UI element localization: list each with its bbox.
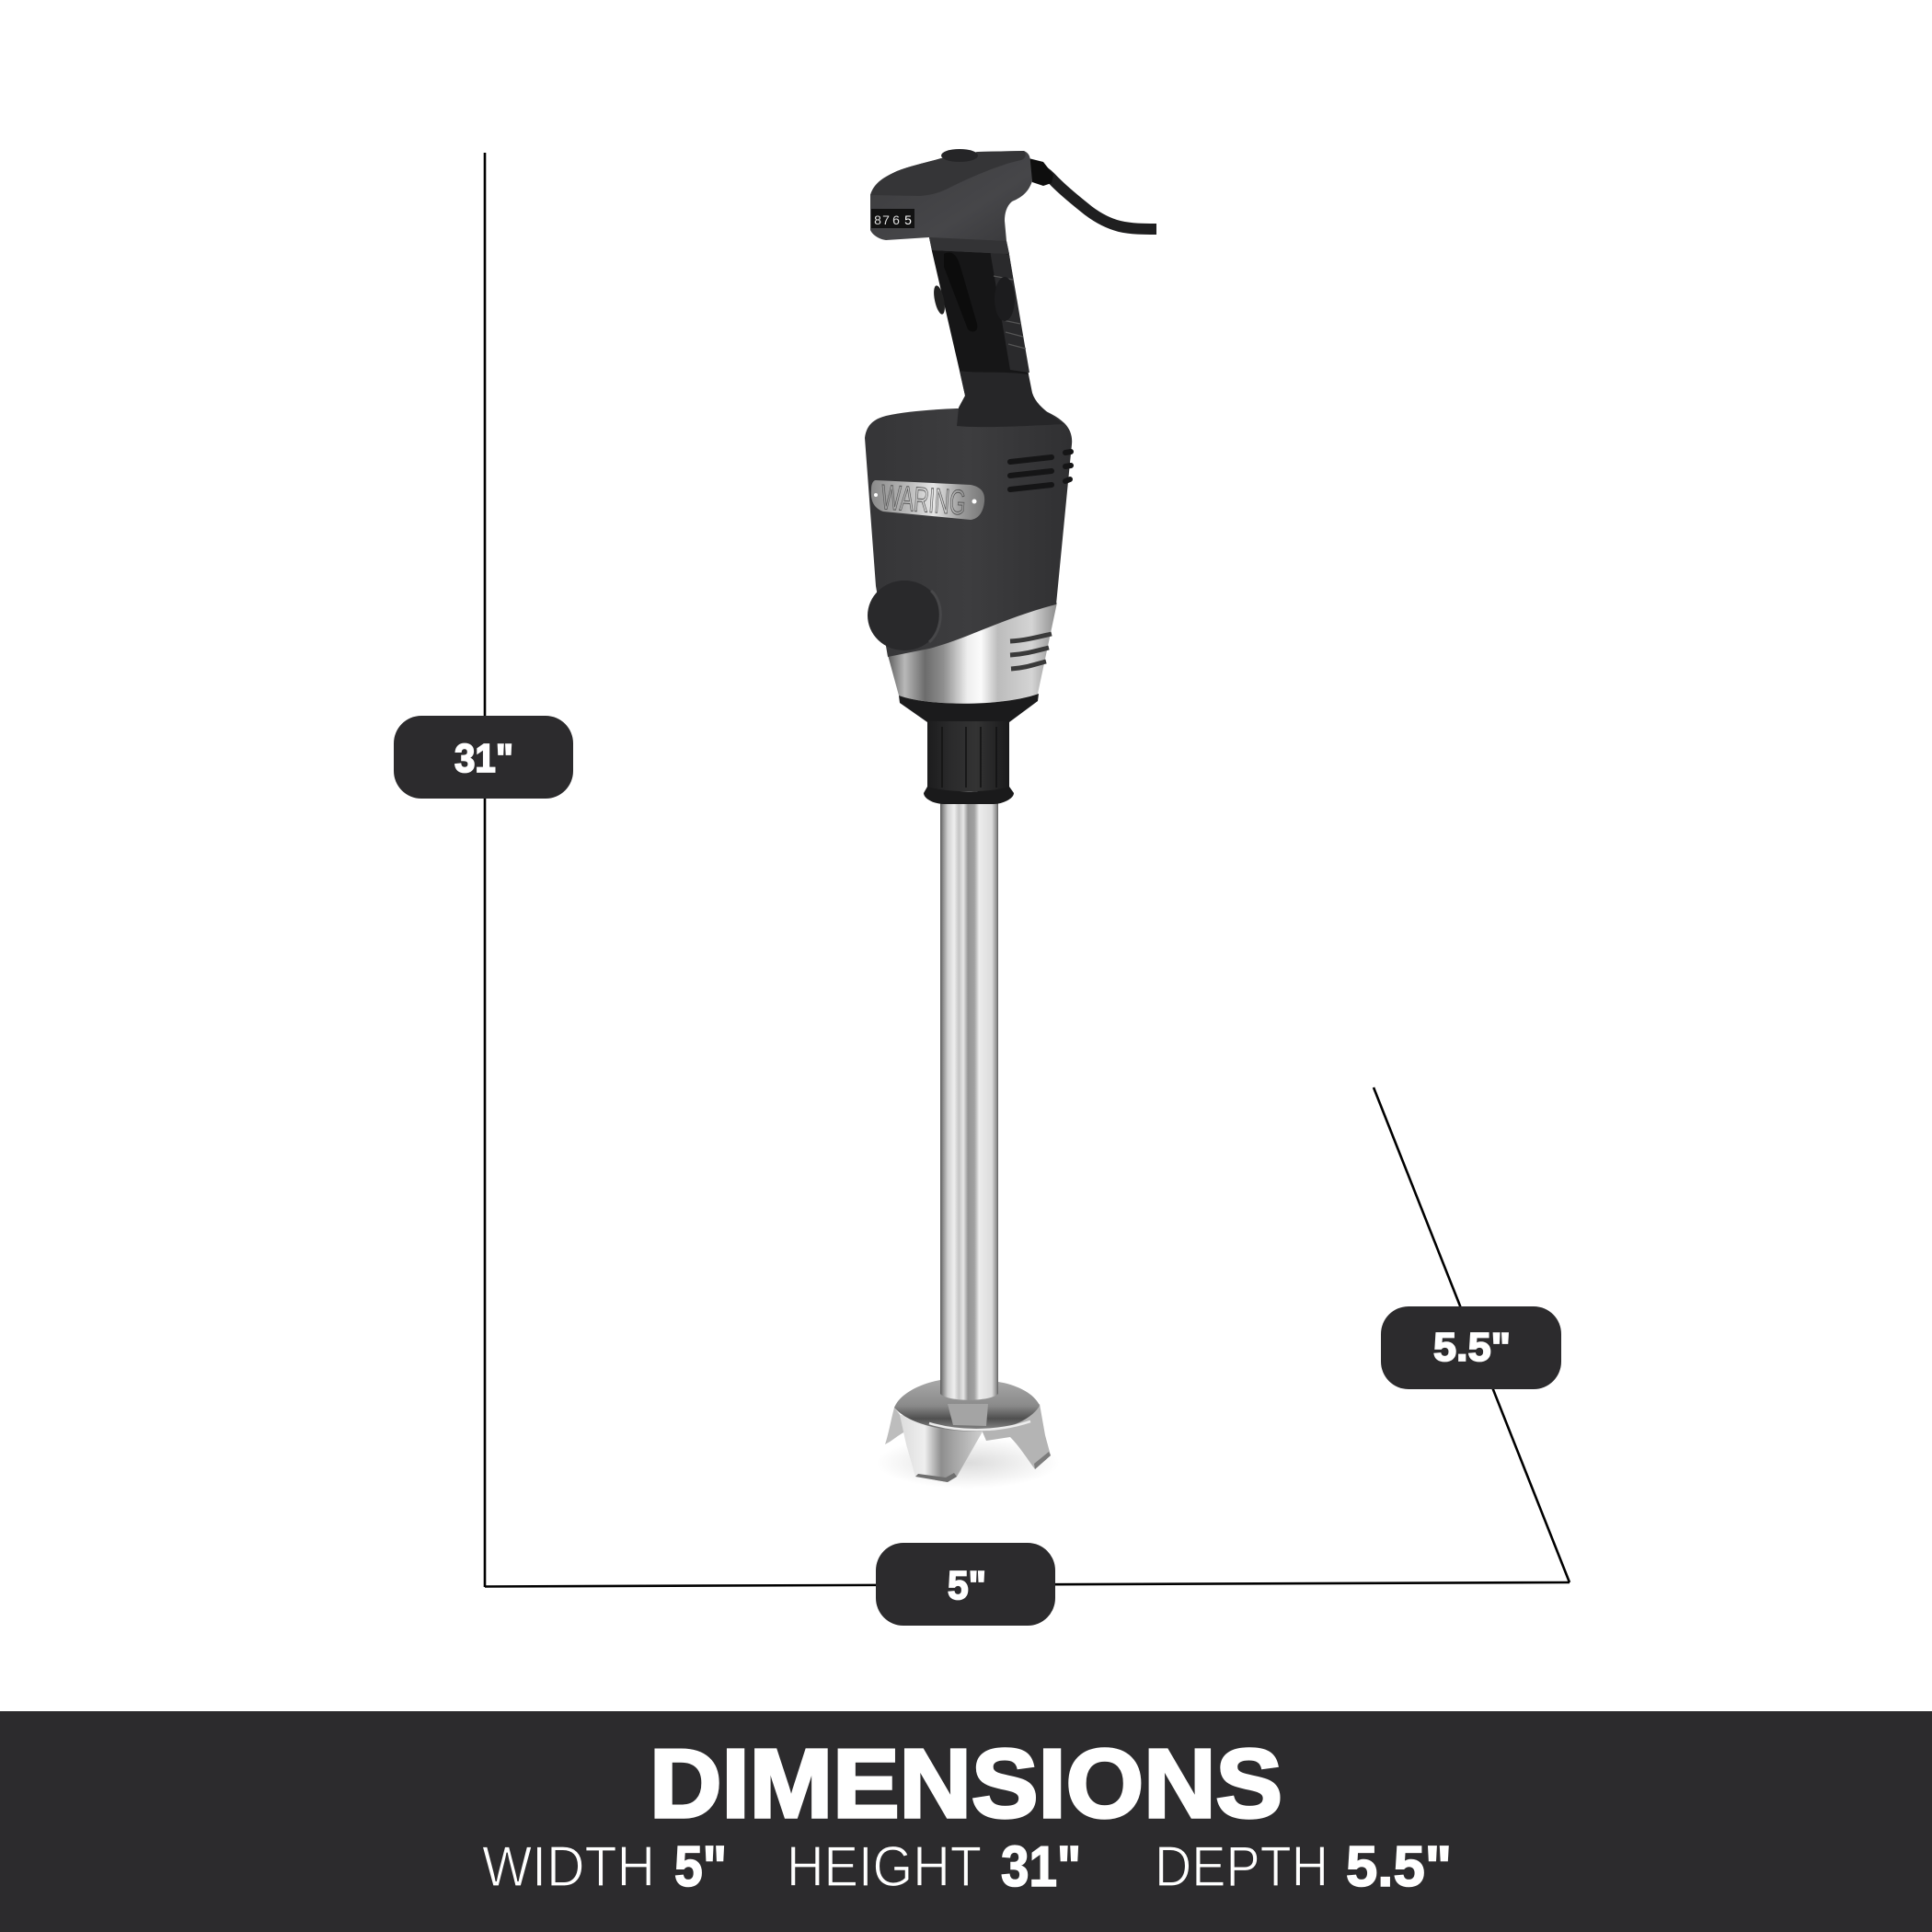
grip handle [929, 237, 1064, 427]
dimension line: height [484, 153, 486, 1587]
collar ring [924, 787, 1014, 804]
speed dial: 8 [874, 213, 881, 227]
dimension label: 5.5 inches: 5.5" [1433, 1325, 1511, 1370]
nameplate: WARING [880, 478, 967, 523]
speed dial: 6 [892, 213, 900, 227]
dimension line: depth [1374, 1087, 1570, 1582]
speed dial [871, 209, 914, 228]
speed dial: 7 [882, 213, 890, 227]
housing vents [1010, 452, 1071, 489]
dimension line: width [485, 1582, 1570, 1586]
depth measure [1155, 1835, 1452, 1899]
blade guard foot [876, 1380, 1060, 1489]
height measure: HEIGHT [787, 1835, 982, 1899]
dimension label: 5 inches [876, 1543, 1055, 1626]
power cord [1029, 158, 1156, 229]
chrome motor band [888, 603, 1057, 704]
locking knob [868, 581, 941, 650]
depth measure: 5.5" [1346, 1835, 1452, 1899]
height measure: 31" [1001, 1835, 1081, 1899]
speed dial: 5 [904, 213, 912, 227]
nameplate [871, 478, 984, 523]
collar ridges [942, 727, 996, 788]
dimension label: 31 inches [394, 716, 573, 799]
chrome vents [1010, 634, 1052, 669]
title: DIMENSIONS [650, 1730, 1282, 1838]
width measure: 5" [674, 1835, 727, 1899]
motor housing [865, 408, 1072, 657]
width measure: WIDTH [482, 1835, 655, 1899]
depth measure: DEPTH [1155, 1835, 1328, 1899]
coupling collar [927, 721, 1009, 791]
dimension label: 5.5 inches [1381, 1306, 1561, 1389]
dimension label: 5 inches: 5" [948, 1563, 986, 1608]
black ring below motor [899, 694, 1039, 722]
footer band [0, 1711, 1932, 1932]
dimension label: 31 inches: 31" [454, 736, 513, 781]
product: immersion blender [865, 149, 1156, 1489]
handle head [870, 149, 1032, 254]
shaft tube [940, 799, 998, 1402]
